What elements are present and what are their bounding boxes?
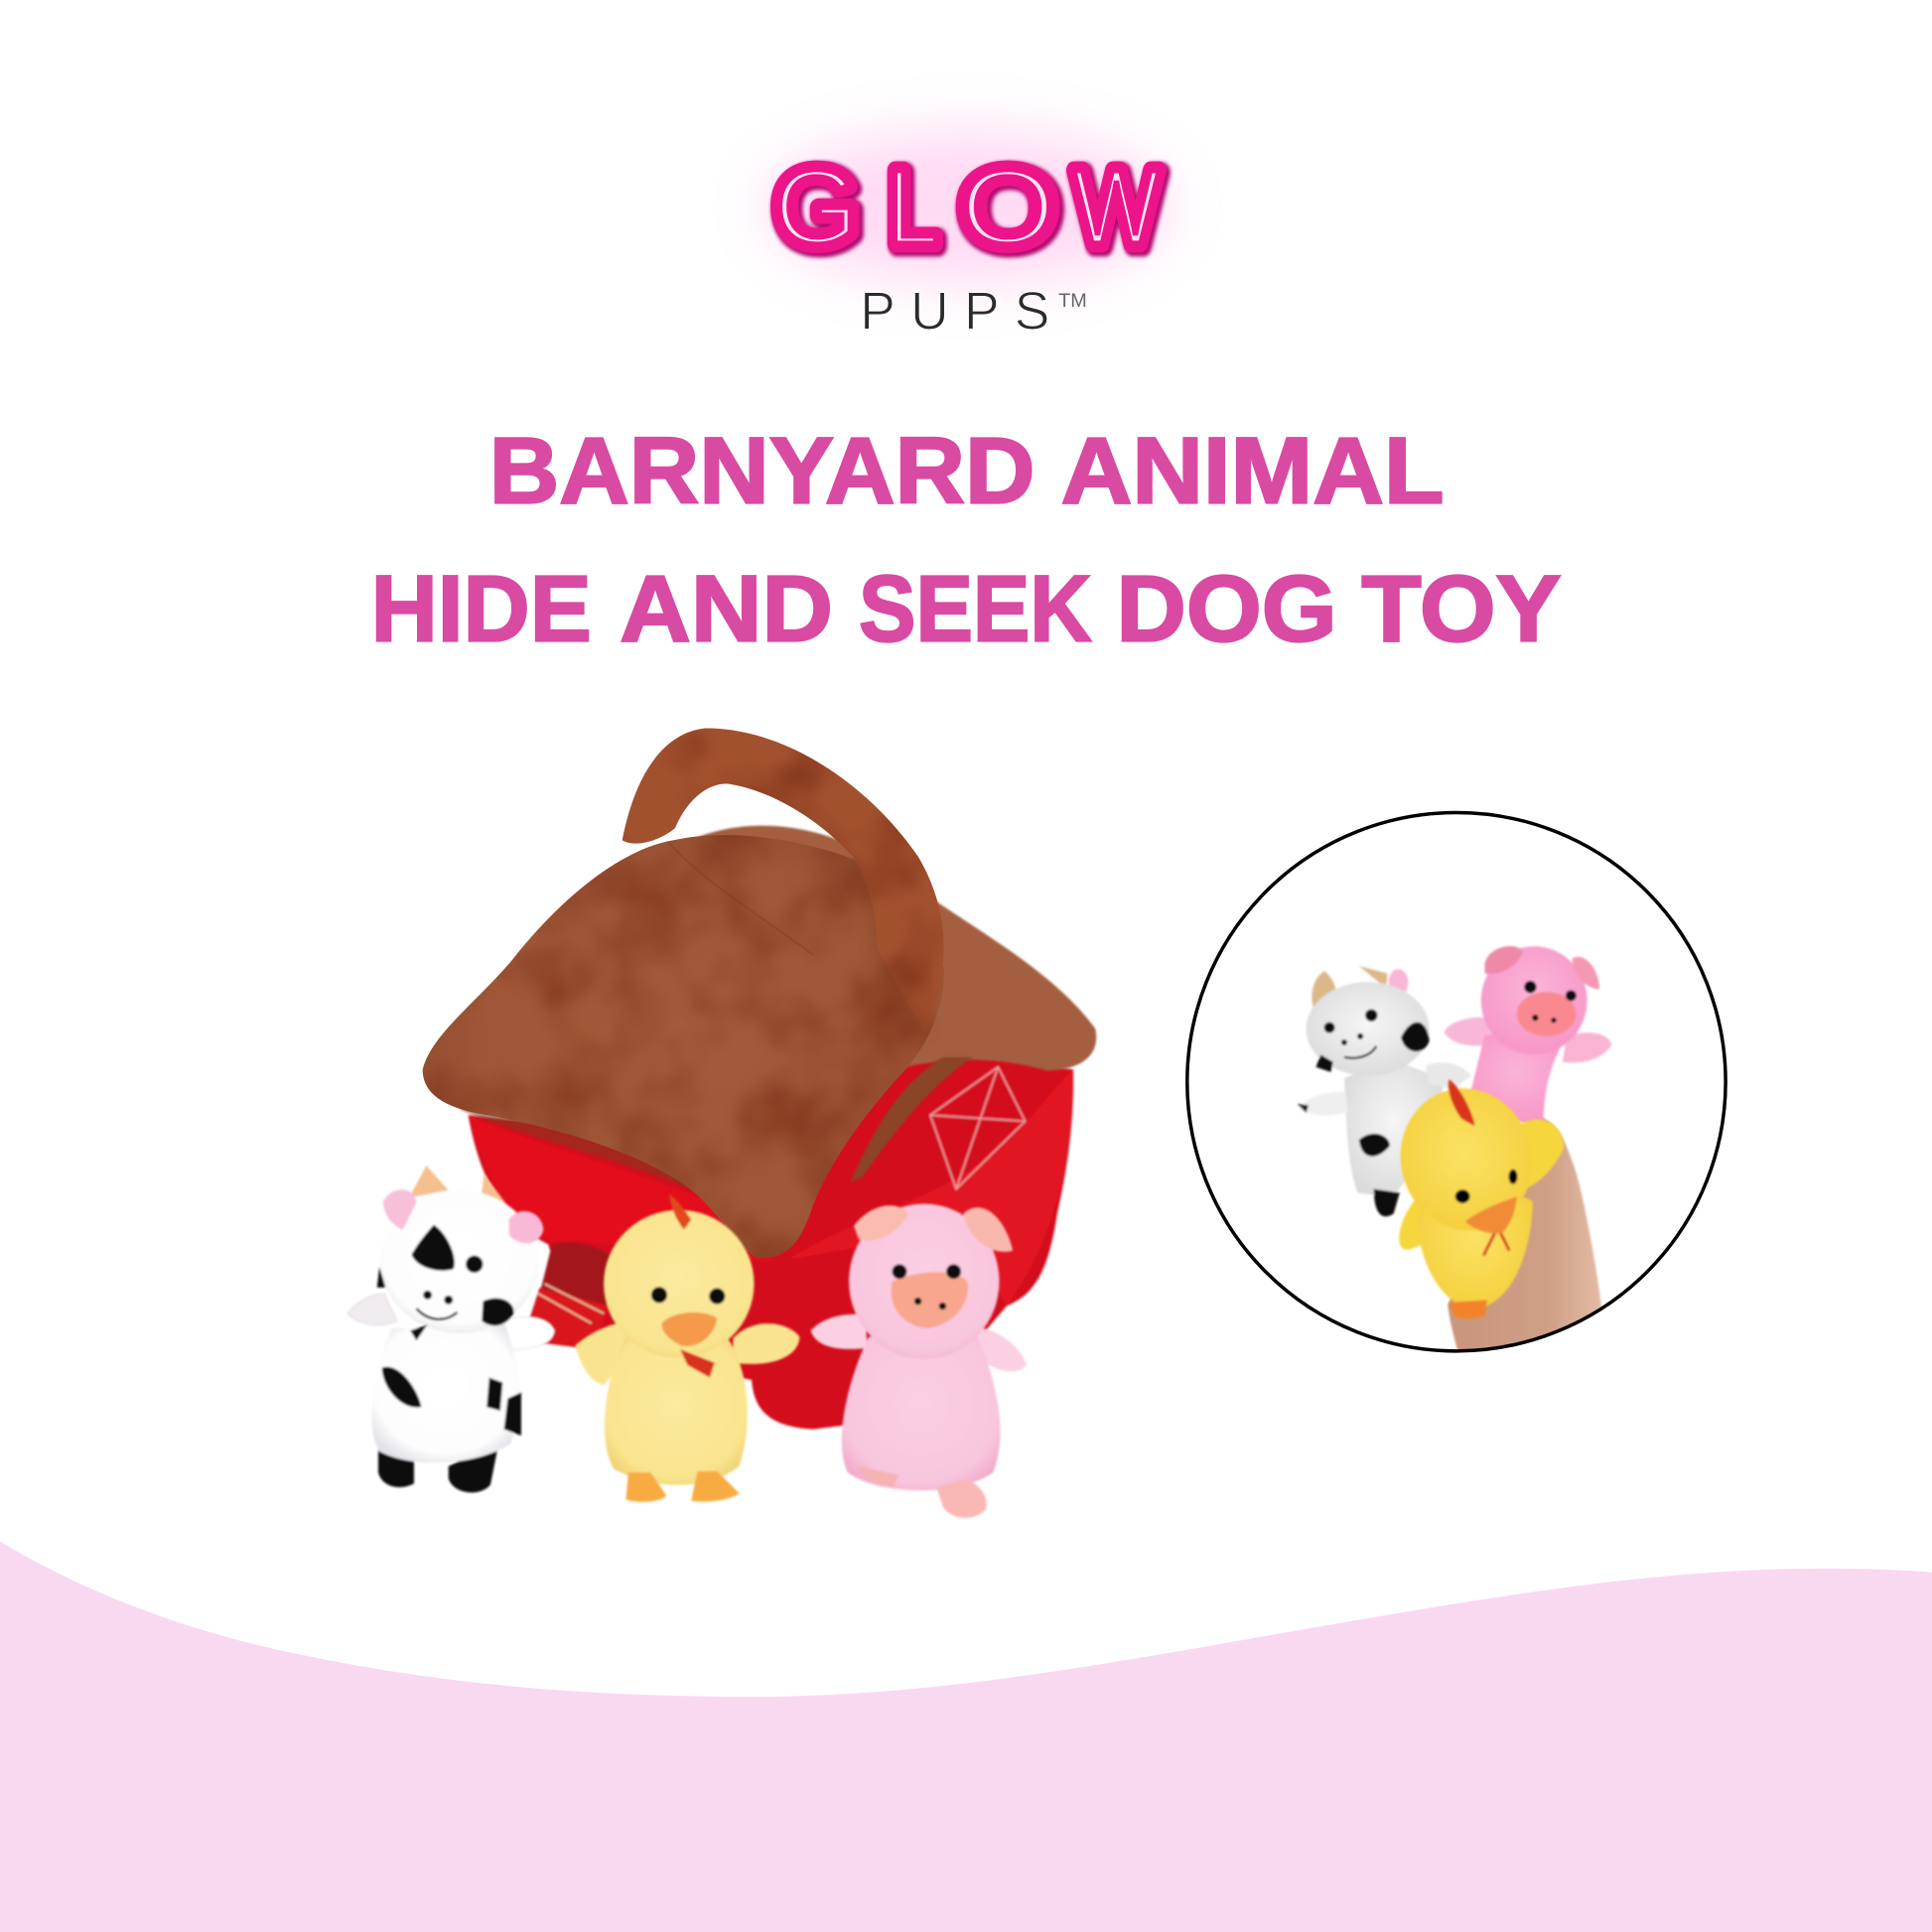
barn door floor [522,1288,610,1349]
circle outline [1187,812,1725,1351]
pig puppet face dots [1524,981,1577,1023]
chick head [604,1210,755,1358]
cow body [372,1324,519,1462]
chick beak [661,1312,717,1346]
title: ANIMAL [1061,418,1445,522]
chick eyes [651,1287,667,1303]
cow ears [383,1189,416,1230]
chick puppet eyes [1455,1189,1470,1203]
cow puppet body [1344,1059,1443,1197]
logo wordmark GLOW: W [1073,147,1160,267]
logo wordmark GLOW: O [960,147,1056,267]
puppet: cow [1298,966,1471,1216]
chick tongue [680,1349,715,1378]
puppet: pig [1445,946,1611,1128]
pig snout [892,1272,968,1328]
pig head [849,1204,1000,1359]
logo glow halo [765,131,1172,283]
chick puppet wing [1399,1197,1440,1250]
cow head [380,1190,538,1333]
inset circle: finger puppets [1187,812,1725,1355]
pig feet [858,1466,899,1486]
logo wordmark GLOW: L [888,147,939,267]
logo wordmark GLOW: G [773,147,859,267]
barn red body [469,1047,1073,1430]
title: TOY [1361,556,1561,660]
pink wave footer [0,1542,1932,1932]
puppet: chick [1385,1073,1564,1318]
trademark: TM [1058,290,1087,312]
chick wings [576,1322,630,1385]
front roof panel [423,835,944,1258]
pig puppet ears [1484,946,1523,974]
title: DOG [1116,556,1337,660]
pig puppet head [1481,946,1587,1054]
cow puppet spots and face [1298,1009,1430,1157]
kite stitching [930,1067,1026,1189]
pig puppet snout [1517,992,1576,1036]
barn handle shadow [858,863,924,1033]
title [371,418,1561,660]
cow puppet head [1307,982,1430,1075]
cow puppet horns and ear [1311,971,1336,1009]
barn doorway [540,1243,628,1307]
logo wordmark GLOW: O [962,149,1058,269]
chick body [605,1337,748,1485]
door stripes [538,1284,604,1323]
toy: cow [347,1166,554,1492]
shaded underside of the roof [459,1103,752,1244]
title: BARNYARD [489,418,1035,522]
logo wordmark GLOW [773,147,1162,269]
chick puppet tongue [1483,1233,1509,1256]
pig nostrils and eyes [893,1264,961,1310]
toy: pig [811,1204,1027,1518]
logo wordmark GLOW: L [890,149,941,269]
logo wordmark GLOW: G [776,149,862,269]
logo wordmark PUPS: PUPS [860,282,1049,341]
logo wordmark GLOW: L [888,147,939,267]
title: AND [620,556,833,660]
chick puppet head [1385,1073,1548,1245]
cow puppet legs [1374,1189,1400,1216]
logo wordmark GLOW: O [960,147,1056,267]
logo wordmark GLOW: W [1073,147,1160,267]
toy: chick [576,1194,799,1502]
logo: Glow Pups [765,131,1172,341]
logo wordmark GLOW: W [1075,149,1162,269]
cow arms [347,1294,397,1325]
chick feet [625,1472,666,1502]
title: SEEK [859,556,1092,660]
pig arms [811,1314,868,1349]
cow puppet smile [1344,1046,1376,1058]
chick puppet beak [1465,1196,1517,1234]
cow feet [378,1445,414,1487]
pig body [842,1330,1000,1490]
chick puppet foot [1449,1300,1487,1318]
title: HIDE [371,556,592,660]
pig puppet arms [1445,1018,1497,1045]
cow puppet arms [1299,1092,1348,1115]
cow smile [416,1309,457,1319]
chick puppet body [1417,1176,1533,1309]
back roof [671,826,1096,1070]
chick puppet comb [1449,1079,1475,1126]
logo wordmark GLOW: G [773,147,859,267]
pig puppet body [1466,1035,1568,1128]
cow spots [377,1225,521,1436]
cow horns [409,1166,449,1197]
chick comb [669,1194,691,1230]
pig ears [854,1205,908,1241]
roof seam [669,843,813,955]
hand and finger [1448,1115,1601,1355]
barn handle [622,728,944,1033]
product: barn toy with animals [347,728,1096,1518]
